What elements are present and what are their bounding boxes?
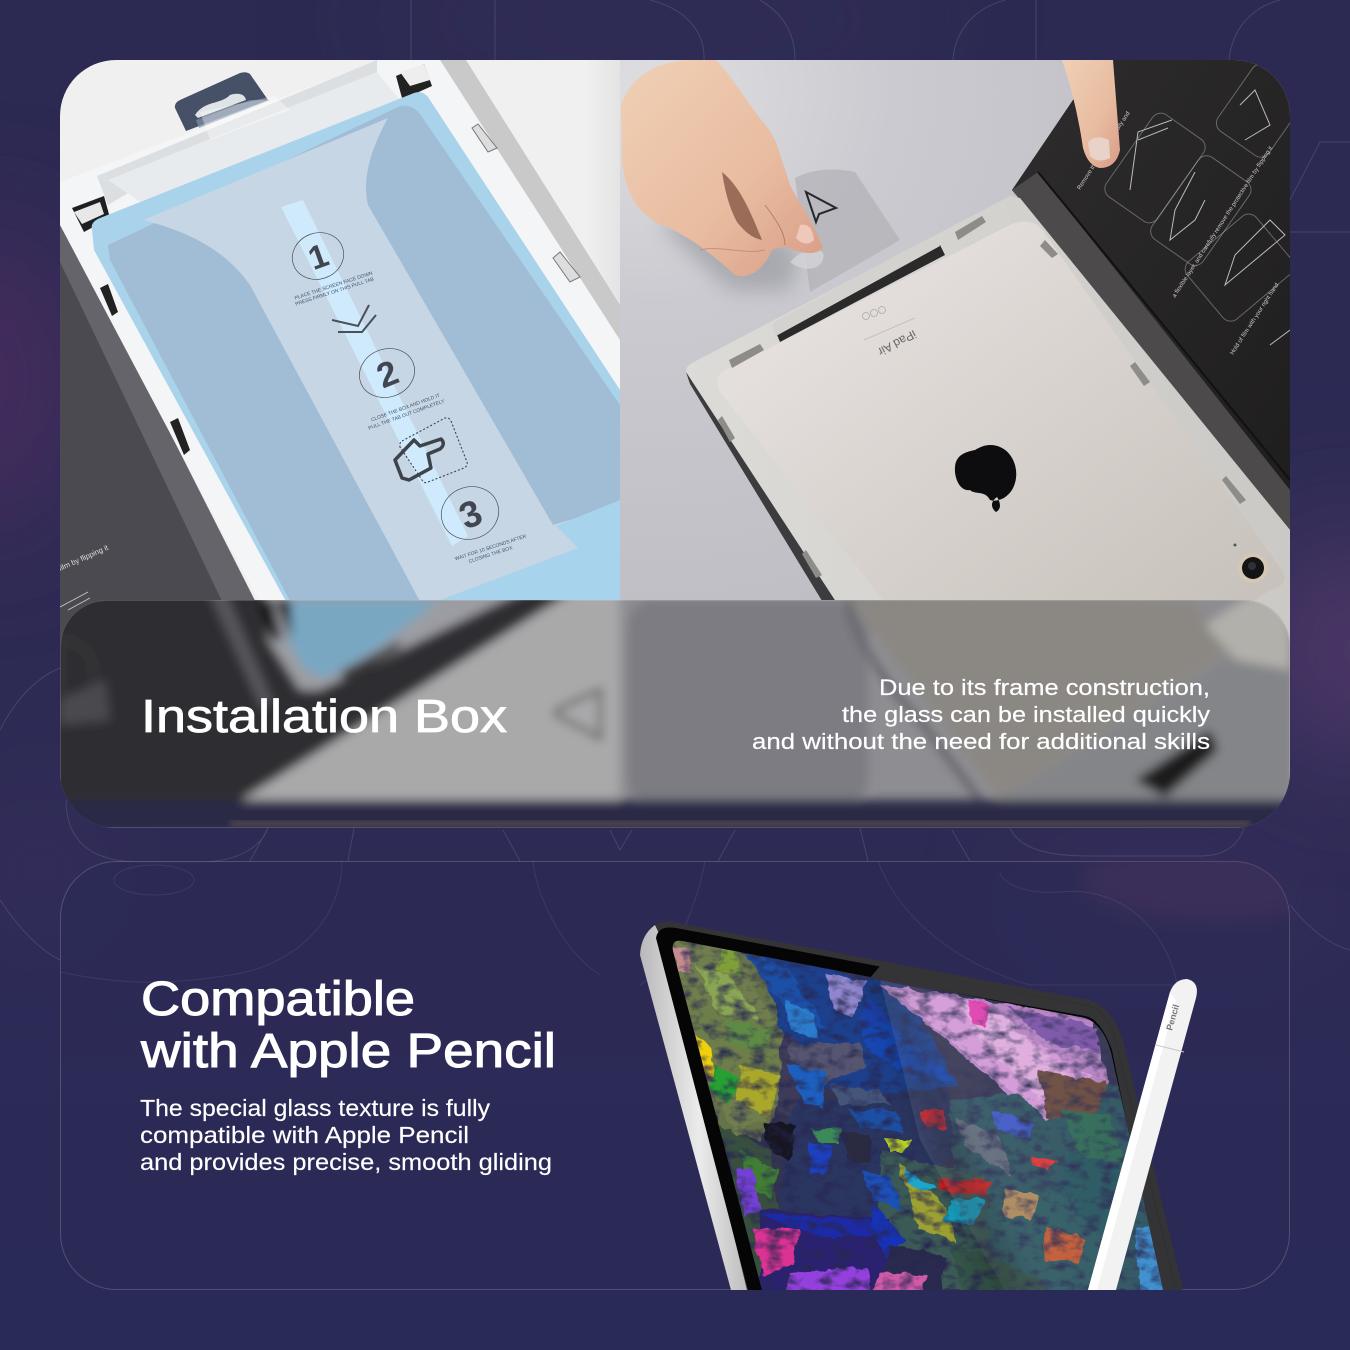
box frame xyxy=(686,196,1290,660)
iPad back xyxy=(718,222,1284,601)
frame clips xyxy=(718,216,1246,578)
panel: blurred glass caption bar xyxy=(50,590,1300,836)
text: frame construction note xyxy=(753,678,1210,750)
left hand xyxy=(621,60,823,276)
step 2: CLOSE THE BOX AND HOLD IT xyxy=(370,393,441,423)
step 3: CLOSING THE BOX xyxy=(468,545,514,565)
painting on screen xyxy=(672,940,1163,1290)
pale central band xyxy=(144,118,578,600)
step 2: PULL THE TAB OUT COMPLETELY xyxy=(368,398,446,432)
white box frame xyxy=(60,60,620,453)
step 2: 2 xyxy=(371,353,404,396)
step 1: PRESS FIRMLY ON THIS PULL TAB xyxy=(295,276,375,308)
step 1: PLACE THE SCREEN FACE DOWN xyxy=(294,270,374,302)
paint texture xyxy=(672,941,1163,1290)
dark cover with instructions: a flexible layer, and carefully remove the protective film by flipping it xyxy=(1172,145,1274,299)
Apple Pencil xyxy=(1088,979,1197,1290)
bottom blue strip xyxy=(440,500,620,600)
text: frame construction note: Due to its frame construction, xyxy=(879,675,1210,700)
iPad with painted screen xyxy=(640,922,1183,1300)
heading: compatible with Apple Pencil: with Apple Pencil xyxy=(140,1025,556,1078)
peel tab with arrow xyxy=(790,170,900,292)
text: glass texture description: and provides precise, smooth gliding xyxy=(140,1149,552,1175)
colour underpainting xyxy=(706,952,784,1142)
panel: installation box card xyxy=(50,60,1309,836)
hang tab xyxy=(175,72,290,140)
step 3: 3 xyxy=(453,492,488,537)
grey outer edge of box xyxy=(440,60,620,345)
camera xyxy=(1238,553,1268,583)
dark cover with instructions: Remove the new film carefully and xyxy=(1077,111,1132,191)
Apple logo xyxy=(955,445,1016,512)
text: glass texture description: The special glass texture is fully xyxy=(140,1095,491,1121)
text: glass texture description: compatible with Apple Pencil xyxy=(140,1122,469,1148)
text: frame construction note: and without the need for additional skills xyxy=(752,729,1210,754)
bar outline xyxy=(60,600,1290,828)
dark cover with instructions: Hold of film with your right hand xyxy=(1230,282,1280,356)
blue film xyxy=(92,92,620,600)
dark cover panel xyxy=(60,262,222,644)
corner clips xyxy=(396,64,432,98)
cover caption: film by flipping it xyxy=(57,543,110,573)
Pencil label: Pencil xyxy=(1164,1003,1181,1032)
right finger xyxy=(1062,60,1120,168)
step 3 xyxy=(440,486,526,563)
screen glare xyxy=(880,980,1120,1290)
photo: hands removing film above iPad xyxy=(620,60,1309,660)
dark cover with instructions xyxy=(1012,60,1309,530)
photo: open installation box with blue film xyxy=(57,60,620,660)
text: glass texture description xyxy=(140,1095,552,1175)
step 3: WAIT FOR 10 SECONDS AFTER xyxy=(454,534,528,562)
text: frame construction note: the glass can be installed quickly xyxy=(842,702,1211,727)
heading: compatible with Apple Pencil xyxy=(140,973,556,1078)
step 1: 1 xyxy=(303,236,333,277)
iPad Air label: iPad Air xyxy=(875,327,919,359)
heading: Installation Box: Installation Box xyxy=(141,690,507,742)
hand pictogram xyxy=(395,418,467,483)
step 2 xyxy=(359,348,444,430)
hand shadow xyxy=(662,226,802,297)
chevrons xyxy=(332,305,376,332)
pull tab stripe xyxy=(281,200,468,546)
panel: apple pencil card xyxy=(60,840,1350,1290)
step 1 xyxy=(292,232,374,306)
heading: compatible with Apple Pencil: Compatible xyxy=(141,973,415,1026)
